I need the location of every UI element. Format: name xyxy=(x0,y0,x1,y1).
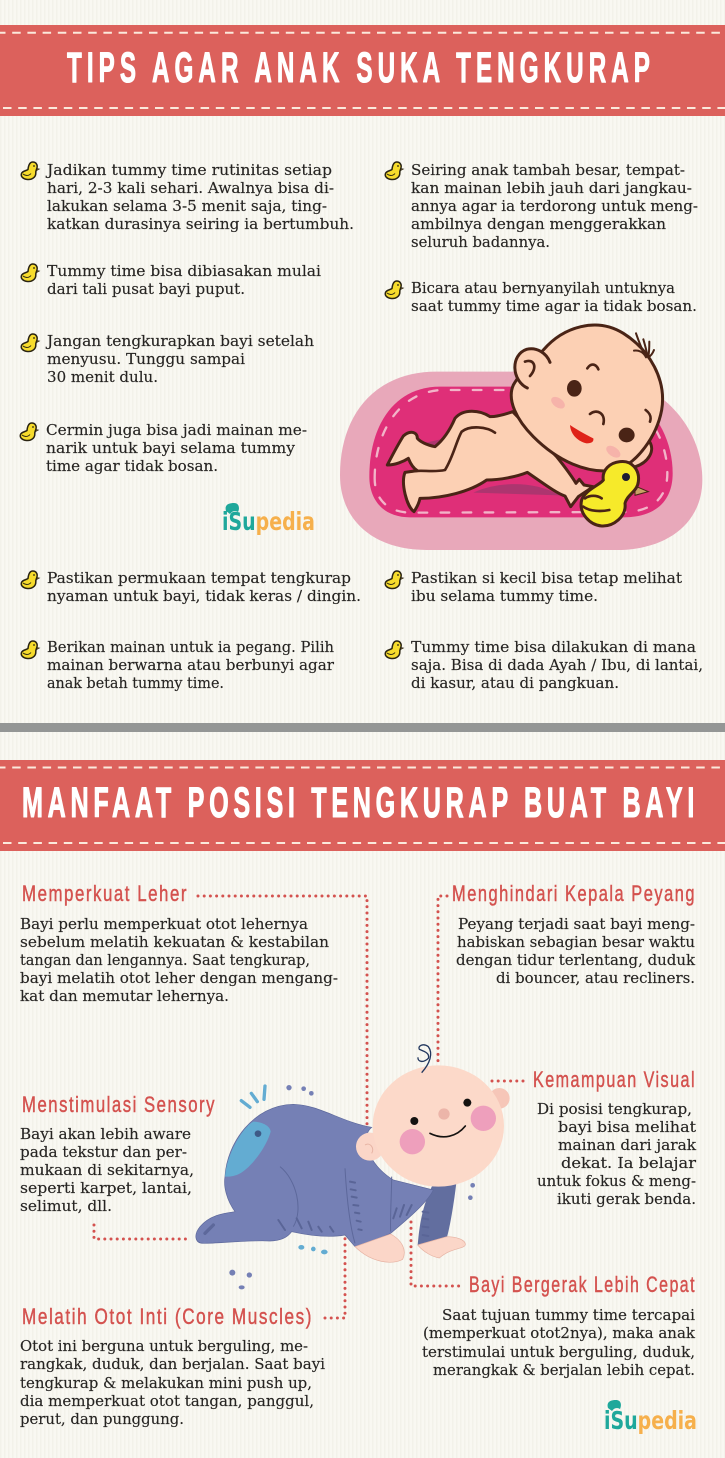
far arm xyxy=(623,440,652,467)
tip 3 xyxy=(21,334,314,386)
block: menstimulasi sensory: seperti karpet, lantai, xyxy=(20,1181,192,1197)
block: kemampuan visual: Di posisi tengkurap, xyxy=(537,1102,692,1118)
face xyxy=(549,365,651,460)
block: memperkuat leher: bayi melatih otot leher dengan mengang- xyxy=(20,971,338,987)
tips left column xyxy=(20,162,361,692)
back arm xyxy=(418,1180,457,1245)
title banner: tips xyxy=(0,25,725,116)
block: memperkuat leher: kat dan memutar lehernya. xyxy=(20,989,229,1005)
tip 1: lakukan selama 3-5 menit saja, ting- xyxy=(47,199,327,215)
tip 2: dari tali pusat bayi puput. xyxy=(47,282,245,298)
hip patch xyxy=(225,1122,271,1177)
hair xyxy=(634,333,654,357)
tip 6: mainan berwarna atau berbunyi agar xyxy=(47,658,334,674)
logo: isupedia top: iSupedia xyxy=(222,507,315,536)
block: memperkuat leher: sebelum melatih kekuatan & kestabilan xyxy=(20,935,329,951)
tip 5 xyxy=(21,571,361,605)
block: menstimulasi sensory xyxy=(20,1092,216,1215)
block: kemampuan visual: dekat. Ia belajar xyxy=(561,1156,696,1172)
tip 2: Tummy time bisa dibiasakan mulai xyxy=(47,264,321,280)
play mat xyxy=(340,372,702,550)
tip 9: ibu selama tummy time. xyxy=(411,589,598,605)
tip 4: narik untuk bayi selama tummy xyxy=(46,441,296,457)
sleeve stripes xyxy=(278,1182,428,1236)
tip 3: 30 menit dulu. xyxy=(47,370,158,386)
tip 4: Cermin juga bisa jadi mainan me- xyxy=(46,423,307,439)
tip 7: Seiring anak tambah besar, tempat- xyxy=(411,163,685,179)
block: menghindari kepala peyang: Peyang terjadi saat bayi meng- xyxy=(458,917,695,933)
tip 1: Jadikan tummy time rutinitas setiap xyxy=(45,163,332,179)
block: bayi bergerak lebih cepat: (memperkuat otot2nya), maka anak xyxy=(423,1326,695,1342)
body xyxy=(196,1104,433,1247)
block: melatih otot inti: Melatih Otot Inti (Core Muscles) xyxy=(22,1304,313,1329)
logo: isupedia bottom: iSupedia xyxy=(604,1406,697,1435)
tip 8: Bicara atau bernyanyilah untuknya xyxy=(411,281,675,297)
tip 9: Pastikan si kecil bisa tetap melihat xyxy=(411,571,682,587)
tip 7: ambilnya dengan menggerakkan xyxy=(411,217,666,233)
illustration: crawling baby in blue onesie xyxy=(196,1045,510,1289)
block: melatih otot inti: perut, dan punggung. xyxy=(20,1412,184,1428)
block: melatih otot inti: tengkurap & melakukan mini push up, xyxy=(20,1376,312,1392)
tip 8: saat tummy time agar ia tidak bosan. xyxy=(411,299,697,315)
tip 9 xyxy=(385,571,682,605)
tip 8 xyxy=(385,281,697,315)
leg line xyxy=(410,427,495,472)
block: melatih otot inti: rangkak, duduk, dan berjalan. Saat bayi xyxy=(20,1357,325,1373)
ear xyxy=(515,349,550,388)
block: bayi bergerak lebih cepat: Saat tujuan tummy time tercapai xyxy=(442,1308,695,1324)
back hand xyxy=(418,1237,465,1258)
block: menghindari kepala peyang: dengan tidur terlentang, duduk xyxy=(456,953,695,969)
gray section divider xyxy=(0,723,725,732)
tip 10 xyxy=(385,640,703,692)
dotted connectors xyxy=(94,896,525,1318)
tip 5: Pastikan permukaan tempat tengkurap xyxy=(47,571,351,587)
head xyxy=(373,1065,504,1187)
tip 10: saja. Bisa di dada Ayah / Ibu, di lantai, xyxy=(411,658,703,674)
title banner: manfaat xyxy=(0,760,725,851)
tip 7: seluruh badannya. xyxy=(411,235,550,251)
block: menstimulasi sensory: selimut, dll. xyxy=(20,1199,112,1215)
face xyxy=(400,1099,496,1154)
tip 7 xyxy=(385,162,698,251)
tips right column xyxy=(385,162,703,692)
hair curl xyxy=(418,1045,431,1073)
block: bayi bergerak lebih cepat: terstimulai untuk berguling, duduk, xyxy=(422,1345,695,1361)
rubber duck xyxy=(581,461,648,526)
tip 2 xyxy=(21,264,321,298)
block: kemampuan visual: mainan dari jarak xyxy=(558,1138,696,1154)
tip 1: katkan durasinya seiring ia bertumbuh. xyxy=(47,217,354,233)
block: kemampuan visual: untuk fokus & meng- xyxy=(537,1174,696,1190)
block: kemampuan visual: bayi bisa melihat xyxy=(558,1120,696,1136)
block: memperkuat leher: tangan dan lengannya. Saat tengkurap, xyxy=(20,953,310,969)
tip 7: annya agar ia terdorong untuk meng- xyxy=(411,199,698,215)
block: melatih otot inti: dia memperkuat otot tangan, panggul, xyxy=(20,1394,314,1410)
tip 6: Berikan mainan untuk ia pegang. Pilih xyxy=(47,640,334,656)
block: bayi bergerak lebih cepat xyxy=(422,1272,696,1379)
tip 5: nyaman untuk bayi, tidak keras / dingin. xyxy=(47,589,361,605)
block: memperkuat leher xyxy=(20,881,338,1005)
near ear xyxy=(356,1133,384,1161)
block: menghindari kepala peyang: habiskan sebagian besar waktu xyxy=(457,935,695,951)
illustration: baby on play mat with duck xyxy=(340,325,702,550)
block: menghindari kepala peyang xyxy=(452,881,696,987)
decorative ticks and dots xyxy=(229,1085,475,1289)
block: melatih otot inti: Otot ini berguna untuk berguling, me- xyxy=(20,1339,308,1355)
block: menghindari kepala peyang: di bouncer, atau recliners. xyxy=(496,971,695,987)
tip 6: anak betah tummy time. xyxy=(47,676,224,692)
front hand xyxy=(355,1234,404,1262)
head xyxy=(511,325,663,471)
baby body xyxy=(387,411,593,512)
block: kemampuan visual: ikuti gerak benda. xyxy=(557,1192,696,1208)
tip 10: di kasur, atau di pangkuan. xyxy=(411,676,619,692)
body details xyxy=(280,1167,392,1243)
tip 7: kan mainan lebih jauh dari jangkau- xyxy=(411,181,692,197)
tip 3: Jangan tengkurapkan bayi setelah xyxy=(45,334,314,350)
block: kemampuan visual xyxy=(533,1067,696,1208)
toes mark xyxy=(205,1225,213,1233)
block: memperkuat leher: Bayi perlu memperkuat otot lehernya xyxy=(20,917,308,933)
tip 10: Tummy time bisa dilakukan di mana xyxy=(411,640,696,656)
tip 4: time agar tidak bosan. xyxy=(46,459,218,475)
block: menstimulasi sensory: Menstimulasi Sensory xyxy=(22,1092,216,1117)
tip 4 xyxy=(20,423,307,475)
tip 6 xyxy=(21,640,334,692)
block: menstimulasi sensory: mukaan di sekitarnya, xyxy=(20,1163,194,1179)
block: melatih otot inti xyxy=(20,1304,325,1428)
block: menstimulasi sensory: Bayi akan lebih aware xyxy=(20,1127,191,1143)
block: menstimulasi sensory: pada tekstur dan per- xyxy=(20,1145,187,1161)
block: memperkuat leher: Memperkuat Leher xyxy=(22,881,188,906)
tip 1: hari, 2-3 kali sehari. Awalnya bisa di- xyxy=(47,181,334,197)
block: bayi bergerak lebih cepat: merangkak & berjalan lebih cepat. xyxy=(433,1363,695,1379)
tip 3: menyusu. Tunggu sampai xyxy=(47,352,245,368)
far ear xyxy=(489,1088,510,1109)
tip 1 xyxy=(21,162,354,233)
